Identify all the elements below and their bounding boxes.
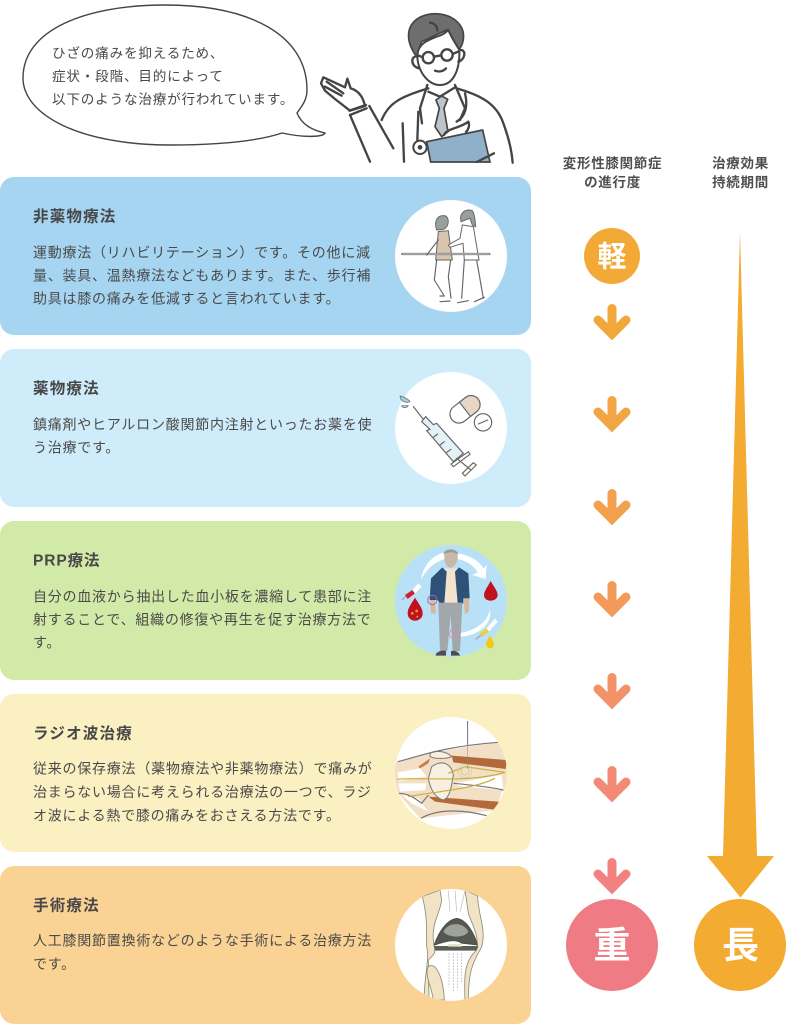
panel: drug therapy: 鎮痛剤やヒアルロン酸関節内注射といったお薬を使: [33, 416, 372, 432]
panel: PRP therapy: 自分の血液から抽出した血小板を濃縮して患部に注: [33, 588, 372, 604]
badge: severe: 重: [594, 925, 630, 966]
badge: long: [694, 899, 786, 991]
column heading: progression: [563, 155, 662, 190]
panel: drug therapy: 薬物療法: [33, 378, 100, 398]
speech bubble: ひざの痛みを抑えるため、: [52, 45, 224, 61]
panel: non-drug therapy: 助具は膝の痛みを低減すると言われています。: [33, 290, 340, 306]
icon: walking rehabilitation: [395, 200, 507, 312]
icon: PRP patient: [395, 545, 507, 657]
panel: surgery: です。: [33, 956, 76, 972]
column heading: progression: の進行度: [584, 175, 641, 190]
panel: radiofrequency therapy: オ波による熱で膝の痛みをおさえる方法です。: [33, 808, 341, 824]
panel: radiofrequency therapy: [0, 694, 531, 852]
panel: surgery: 人工膝関節置換術などのような手術による治療方法: [33, 932, 372, 948]
panel: non-drug therapy: 非薬物療法: [33, 206, 117, 226]
speech bubble: 以下のような治療が行われています。: [52, 92, 294, 107]
speech bubble: 症状・段階、目的によって: [52, 69, 224, 84]
panel: radiofrequency therapy: 治まらない場合に考えられる治療法の一つで、ラジ: [33, 784, 372, 800]
column heading: duration: [712, 155, 769, 190]
panel: PRP therapy: 射することで、組織の修復や再生を促す治療方法で: [33, 612, 372, 628]
column heading: progression: 変形性膝関節症: [563, 155, 662, 171]
column heading: duration: 持続期間: [712, 174, 769, 190]
panel: drug therapy: [0, 349, 531, 507]
panel: radiofrequency therapy: ラジオ波治療: [33, 724, 133, 742]
icon: knee cross-section with needle: [395, 717, 508, 829]
doctor's open hand: [321, 77, 365, 111]
panel: drug therapy: う治療です。: [33, 440, 120, 456]
icon: syringe and pills: [395, 372, 507, 484]
panel: surgery: [0, 866, 531, 1024]
icon: knee replacement: [395, 889, 507, 1001]
doctor illustration: [321, 14, 513, 163]
arrows: progression down: [598, 308, 626, 888]
panel: PRP therapy: PRP療法: [33, 550, 100, 570]
arrow: long duration: [707, 232, 774, 898]
badge: severe: [566, 899, 658, 991]
column heading: duration: 治療効果: [712, 155, 769, 171]
panel: non-drug therapy: 運動療法（リハビリテーション）です。その他に減: [33, 244, 371, 260]
speech bubble: [23, 5, 325, 145]
panel: radiofrequency therapy: 従来の保存療法（薬物療法や非薬物療法）で痛みが: [33, 760, 372, 776]
panel: PRP therapy: [0, 521, 531, 680]
badge: long: 長: [722, 925, 759, 966]
panel: non-drug therapy: 量、装具、温熱療法などもあります。また、歩行補: [33, 268, 371, 284]
badge: mild: [584, 228, 640, 284]
panel: surgery: 手術療法: [33, 896, 100, 914]
badge: mild: 軽: [597, 240, 627, 274]
panel: PRP therapy: す。: [33, 634, 61, 650]
panel: non-drug therapy: [0, 177, 531, 335]
